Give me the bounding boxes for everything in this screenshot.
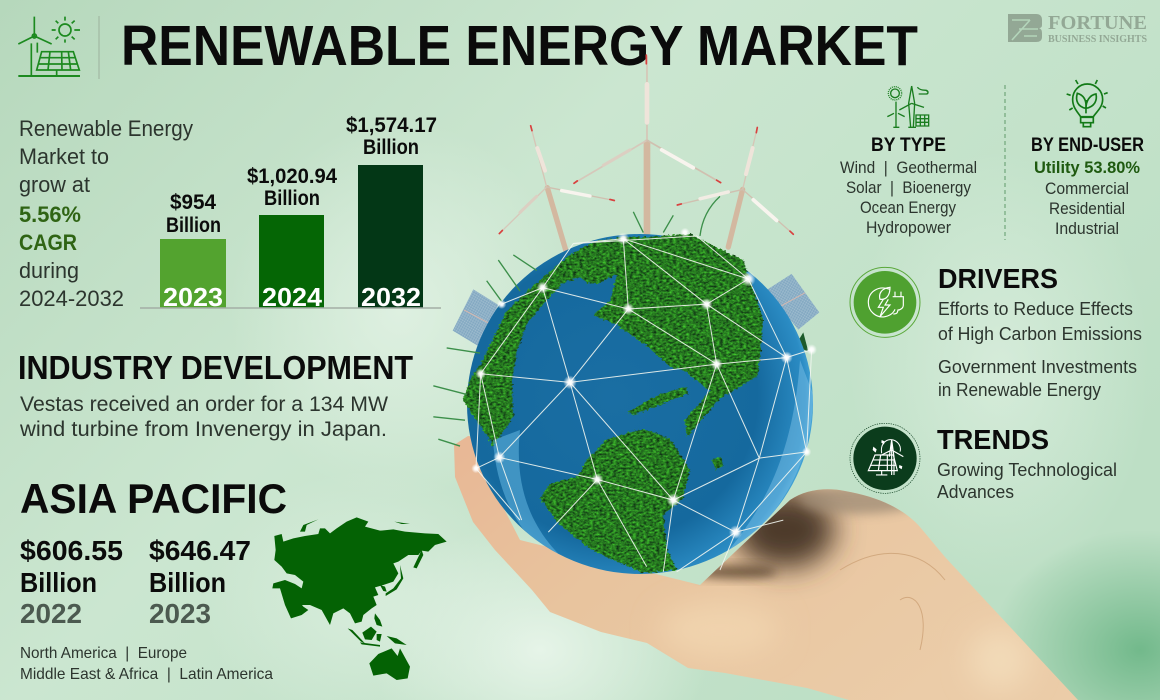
bar 2032: Billion [363, 136, 419, 159]
wind turbine: centre [574, 55, 721, 238]
bar 2023 [160, 191, 226, 312]
title: RENEWABLE ENERGY MARKET [121, 14, 918, 78]
logo: Fortune Business Insights [1008, 12, 1147, 45]
bar 2023: $954 [170, 191, 216, 214]
icon: wind turbine and solar panel [18, 17, 80, 76]
Asia Pacific values 2023: 2023 [149, 598, 211, 629]
Asia Pacific values 2023: Billion [149, 567, 226, 598]
growth text: Renewable Energy [19, 116, 194, 141]
mesh nodes [471, 228, 817, 539]
other regions [20, 645, 273, 683]
growth text [19, 116, 194, 311]
globe [463, 234, 813, 574]
other regions: Middle East & Africa | Latin America [20, 666, 273, 683]
bar 2032 [346, 114, 437, 312]
bar 2024: Billion [264, 187, 320, 210]
wind turbine: left [499, 126, 614, 253]
bar chart [160, 114, 437, 312]
heading: by end-user: BY END-USER [1031, 135, 1144, 156]
bar 2024 [247, 165, 337, 312]
by type list: Hydropower [866, 219, 951, 237]
end-user list: Commercial [1045, 180, 1129, 198]
wind turbine: right [677, 127, 793, 247]
dashed divider [1004, 85, 1006, 240]
industry development text [19, 393, 388, 441]
bar 2024: $1,020.94 [247, 165, 337, 188]
icon: drivers [850, 267, 920, 337]
chart baseline [140, 307, 441, 309]
land: North America [587, 234, 763, 437]
Asia Pacific values 2023: $646.47 [149, 535, 251, 566]
drivers text: Government Investments [938, 357, 1137, 377]
industry development text: Vestas received an order for a 134 MW [20, 393, 388, 416]
hand holding the globe [454, 436, 1078, 700]
by type list [840, 159, 977, 237]
growth text: 2024-2032 [19, 286, 124, 311]
drivers text: in Renewable Energy [938, 380, 1101, 400]
land: Caribbean [627, 387, 687, 415]
Asia Pacific values 2022: $606.55 [20, 535, 123, 566]
drivers text: of High Carbon Emissions [938, 324, 1142, 344]
bar 2023: Billion [166, 214, 221, 237]
bar 2024: 2024 [262, 282, 323, 312]
trends text [937, 460, 1117, 502]
glass highlight [730, 360, 813, 550]
grass blades on globe edge [433, 196, 720, 446]
drivers text [938, 299, 1142, 400]
land: South America [540, 429, 690, 573]
growth text: Market to [19, 144, 109, 169]
growth text: grow at [19, 172, 91, 197]
icon: by end-user bulb [1067, 80, 1108, 127]
industry development text: wind turbine from Invenergy in Japan. [19, 418, 387, 441]
bar 2023: 2023 [163, 282, 223, 312]
end-user list: Residential [1049, 200, 1125, 218]
Asia Pacific values 2022 [20, 535, 123, 629]
divider beside title [98, 16, 100, 79]
growth text: CAGR [19, 230, 77, 255]
trends text: Advances [937, 482, 1014, 502]
icon: trends [850, 423, 920, 493]
heading: industry development: INDUSTRY DEVELOPMENT [18, 349, 413, 386]
map: Asia Pacific [272, 517, 447, 680]
by type list: Ocean Energy [860, 199, 957, 217]
heading: trends: TRENDS [937, 424, 1049, 455]
heading: by type: BY TYPE [871, 135, 946, 156]
growth text: 5.56% [19, 202, 81, 227]
solar panel: right [766, 274, 819, 351]
end-user list: Industrial [1055, 220, 1119, 238]
logo: Fortune Business Insights: FORTUNE [1048, 12, 1147, 34]
Asia Pacific values 2022: 2022 [20, 598, 82, 629]
icon: by type [887, 86, 929, 127]
logo: Fortune Business Insights: BUSINESS INSIGHTS [1048, 33, 1147, 45]
Asia Pacific values 2023 [149, 535, 251, 629]
solar panel: left [453, 289, 498, 346]
bar 2032: $1,574.17 [346, 114, 437, 137]
trends text: Growing Technological [937, 460, 1117, 480]
end-user list [1034, 159, 1140, 238]
Asia Pacific values 2022: Billion [20, 567, 97, 598]
other regions: North America | Europe [20, 645, 187, 662]
network mesh [471, 228, 817, 572]
growth text: during [19, 258, 79, 283]
end-user list: Utility 53.80% [1034, 159, 1140, 177]
heading: drivers: DRIVERS [938, 263, 1058, 294]
land: left crescent [463, 236, 640, 447]
bar 2032: 2032 [361, 282, 421, 312]
heading: Asia Pacific: ASIA PACIFIC [20, 475, 287, 522]
by type list: Wind | Geothermal [840, 159, 977, 177]
drivers text: Efforts to Reduce Effects [938, 299, 1133, 319]
by type list: Solar | Bioenergy [846, 179, 972, 197]
